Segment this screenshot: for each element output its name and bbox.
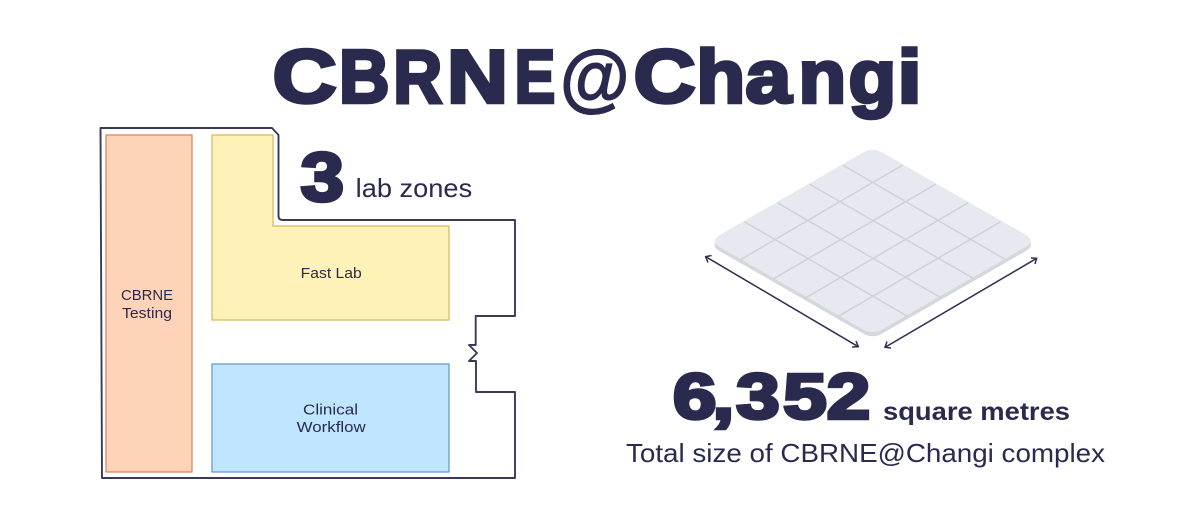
- caption: Total size of CBRNE@Changi complex: [626, 438, 1105, 468]
- icon: isometric floor grid: [706, 150, 1037, 348]
- grid lines: [740, 165, 1005, 317]
- title: n: [798, 34, 846, 118]
- arrow: left dimension: [706, 256, 858, 347]
- title: R: [393, 34, 442, 118]
- zone: CBRNE Testing: CBRNE: [121, 287, 173, 304]
- label square metres: square metres: [883, 398, 1070, 426]
- number 3: 3: [301, 138, 344, 215]
- title: C: [634, 34, 696, 118]
- title: C: [273, 34, 337, 118]
- zone: Clinical Workflow: [212, 364, 449, 472]
- zone: CBRNE Testing: [106, 135, 192, 472]
- zone: Clinical Workflow: Workflow: [297, 419, 366, 436]
- title: N: [447, 34, 508, 118]
- title: h: [696, 34, 745, 118]
- title: @: [560, 34, 630, 118]
- floor plan outline: [100, 128, 515, 478]
- number 6,352: 6,352: [673, 361, 870, 433]
- title: i: [897, 34, 922, 118]
- zone: Clinical Workflow: Clinical: [303, 401, 358, 418]
- title: g: [848, 34, 896, 118]
- floor slab top: [714, 150, 1031, 332]
- panel: floor plan: [100, 128, 515, 478]
- arrow: right dimension: [885, 258, 1037, 348]
- zone: CBRNE Testing: Testing: [122, 305, 172, 322]
- zone: Fast Lab: [212, 135, 449, 320]
- title: B: [339, 34, 390, 118]
- floor slab side: [714, 154, 1031, 336]
- zone: Fast Lab: Fast Lab: [301, 265, 362, 282]
- label lab zones: lab zones: [356, 173, 472, 203]
- title: a: [745, 34, 793, 118]
- title: E: [515, 34, 555, 118]
- stat: 3 lab zones: [301, 138, 472, 215]
- stat: 6,352 square metres: [673, 361, 1070, 433]
